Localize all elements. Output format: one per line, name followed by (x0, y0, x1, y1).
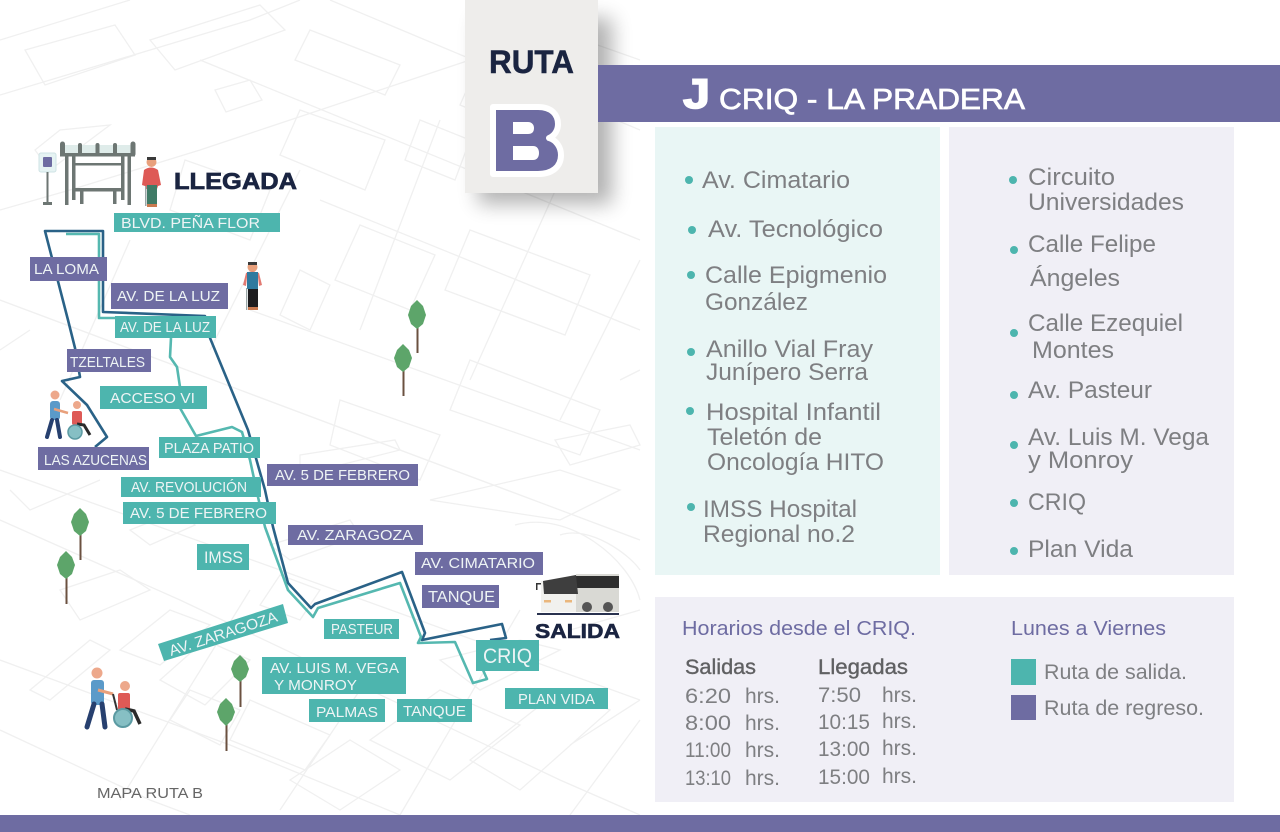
label: Av. 5 de Febrero, regreso (267, 464, 418, 486)
icon: tree 5 (231, 655, 249, 707)
icon: person in blue with cane (243, 262, 262, 310)
departures: Salidas (685, 656, 756, 679)
label: Av. Zaragoza, salida: AV. ZARAGOZA (167, 609, 280, 660)
arrivals: 13:00 (818, 738, 870, 761)
map caption: MAPA RUTA B (97, 786, 203, 802)
arrivals: hrs. (882, 737, 917, 760)
stop: Calle Epigmenio González: González (705, 289, 808, 316)
label: Av. Zaragoza, regreso (288, 525, 423, 545)
arrivals: 15:00 (818, 766, 870, 789)
label: CRIQ (476, 640, 539, 671)
stop: Av. Luis M. Vega y Monroy: Av. Luis M. Vega (1028, 424, 1210, 451)
label: Av. 5 de Febrero, salida (123, 502, 276, 524)
label: Av. Luis M. Vega y Monroy (262, 657, 406, 694)
arrivals (818, 656, 917, 789)
label: Tanque, regreso (422, 585, 499, 608)
label: La Loma: LA LOMA (34, 261, 99, 278)
stop: Av. Luis M. Vega y Monroy (1010, 424, 1210, 474)
route card: Ruta B (465, 0, 598, 193)
route name: CRIQ - LA PRADERA (719, 84, 1026, 116)
label: Acceso VI: ACCESO VI (110, 390, 195, 407)
icon: wheelchair group, upper (47, 390, 90, 439)
footer band (0, 815, 1280, 832)
stop: Anillo Vial Fray Junípero Serra: Anillo Vial Fray (706, 336, 873, 363)
label: Tanque, salida: TANQUE (403, 703, 466, 720)
label: Av. Cimatario: AV. CIMATARIO (421, 555, 535, 572)
departures (685, 656, 780, 790)
stop: Hospital Infantil Teletón de Oncología HITO: Oncología HITO (707, 449, 884, 476)
panel: stops, second column (949, 127, 1234, 575)
stop: Calle Ezequiel Montes: Calle Ezequiel (1028, 310, 1183, 337)
label: Av. Cimatario (415, 552, 543, 575)
label: Pasteur: PASTEUR (331, 621, 393, 638)
icon: bus (536, 574, 619, 615)
heading: schedule: Horarios desde el CRIQ. (682, 618, 916, 640)
arrivals: 7:50 (818, 684, 861, 707)
label: Av. de la Luz, regreso: AV. DE LA LUZ (117, 288, 220, 305)
arrivals: hrs. (882, 710, 917, 733)
letter B (493, 107, 561, 174)
label: Av. 5 de Febrero, salida: AV. 5 DE FEBRERO (130, 505, 267, 522)
stop: Calle Felipe Ángeles: Calle Felipe (1028, 231, 1156, 258)
route line: regreso (45, 231, 506, 640)
label: Av. Luis M. Vega y Monroy: Y MONROY (274, 677, 357, 694)
stop: Circuito Universidades (1009, 164, 1184, 216)
icon: bus stop sign (39, 153, 56, 205)
stop: IMSS Hospital Regional no.2 (687, 496, 857, 548)
stop: Hospital Infantil Teletón de Oncología HITO: Teletón de (707, 424, 822, 451)
stop: IMSS Hospital Regional no.2: Regional no.2 (703, 521, 855, 548)
stop: IMSS Hospital Regional no.2: IMSS Hospital (703, 496, 857, 523)
stop: Calle Felipe Ángeles: Ángeles (1030, 265, 1120, 292)
icon: wheelchair group, lower (87, 668, 140, 727)
route map (30, 142, 620, 802)
heading: days: Lunes a Viernes (1011, 618, 1166, 640)
icon: tree 3 (71, 508, 89, 560)
stop: Calle Epigmenio González (687, 262, 887, 316)
icon: tree 6 (217, 698, 235, 751)
stop: CRIQ: CRIQ (1028, 489, 1086, 516)
stop: Av. Cimatario: Av. Cimatario (702, 167, 850, 194)
legend: outbound route: Ruta de salida. (1044, 661, 1187, 684)
arrivals: hrs. (882, 684, 917, 707)
icon: tree 4 (57, 551, 75, 604)
label: Palmas (309, 699, 385, 722)
label: Plaza Patio: PLAZA PATIO (164, 440, 254, 457)
label: Av. de la Luz, regreso (111, 283, 228, 309)
label: Av. de la Luz, salida: AV. DE LA LUZ (120, 319, 210, 336)
label: Las Azucenas (38, 447, 149, 470)
stop: Anillo Vial Fray Junípero Serra (687, 336, 873, 386)
stop: Av. Luis M. Vega y Monroy: y Monroy (1028, 447, 1133, 474)
label: Av. Zaragoza, regreso: AV. ZARAGOZA (297, 527, 413, 544)
departures: hrs. (745, 767, 780, 790)
stop: Calle Ezequiel Montes: Montes (1032, 337, 1114, 364)
label: Plan Vida (505, 688, 608, 709)
label: Av. Luis M. Vega y Monroy: AV. LUIS M. VEGA (270, 660, 399, 677)
label: Las Azucenas: LAS AZUCENAS (44, 452, 147, 469)
departures: 8:00 (685, 712, 731, 735)
label: Palmas: PALMAS (316, 704, 378, 721)
panel: schedule (655, 597, 1234, 802)
stop: Calle Epigmenio González: Calle Epigmenio (705, 262, 887, 289)
departures: 11:00 (685, 739, 731, 762)
card shadow (478, 18, 612, 204)
icon: tree 1 (408, 300, 426, 353)
label: Tzeltales: TZELTALES (70, 354, 145, 371)
stop: Circuito Universidades: Universidades (1028, 189, 1184, 216)
header band (598, 65, 1280, 122)
icon: bus shelter (60, 142, 136, 205)
departures: 13:10 (685, 767, 731, 790)
departures: hrs. (745, 739, 780, 762)
label: La Loma (30, 257, 107, 281)
label: IMSS: IMSS (204, 548, 243, 567)
stop: Circuito Universidades: Circuito (1028, 164, 1115, 191)
heading: Llegada: LLEGADA (174, 168, 297, 194)
legend: return route: Ruta de regreso. (1044, 697, 1204, 720)
heading: RUTA: RUTA (489, 44, 574, 80)
route letter J: J (683, 70, 710, 117)
departures: hrs. (745, 685, 780, 708)
label: Av. Revolución: AV. REVOLUCIÓN (131, 479, 247, 496)
stop: Hospital Infantil Teletón de Oncología HITO (686, 399, 884, 476)
stop: Calle Ezequiel Montes (1010, 310, 1183, 364)
label: CRIQ: CRIQ (483, 645, 532, 668)
departures: hrs. (745, 712, 780, 735)
route line: salida (66, 234, 487, 683)
label: Plan Vida: PLAN VIDA (518, 691, 595, 708)
label: Av. 5 de Febrero, regreso: AV. 5 DE FEBRERO (275, 467, 410, 484)
arrivals: hrs. (882, 765, 917, 788)
stop: Plan Vida: Plan Vida (1028, 536, 1134, 563)
stop: Av. Pasteur: Av. Pasteur (1028, 377, 1152, 404)
panel: stops, first column (655, 127, 940, 575)
departures: 6:20 (685, 685, 731, 708)
arrivals: 10:15 (818, 711, 870, 734)
icon: tree 2 (394, 344, 412, 396)
heading: Salida: SALIDA (535, 621, 620, 643)
arrivals: Llegadas (818, 656, 908, 679)
label: Blvd. Peña Flor: BLVD. PEÑA FLOR (121, 215, 260, 232)
label: Tanque, salida (397, 699, 472, 722)
label: Tanque, regreso: TANQUE (428, 589, 495, 606)
icon: person in red with cane (142, 157, 161, 207)
stop: Av. Tecnológico: Av. Tecnológico (708, 216, 883, 243)
stop: Calle Felipe Ángeles (1010, 231, 1156, 292)
stop: Anillo Vial Fray Junípero Serra: Junípero Serra (706, 359, 869, 386)
label: Acceso VI (100, 386, 207, 409)
stop: Hospital Infantil Teletón de Oncología HITO: Hospital Infantil (706, 399, 881, 426)
label: IMSS (197, 544, 249, 570)
